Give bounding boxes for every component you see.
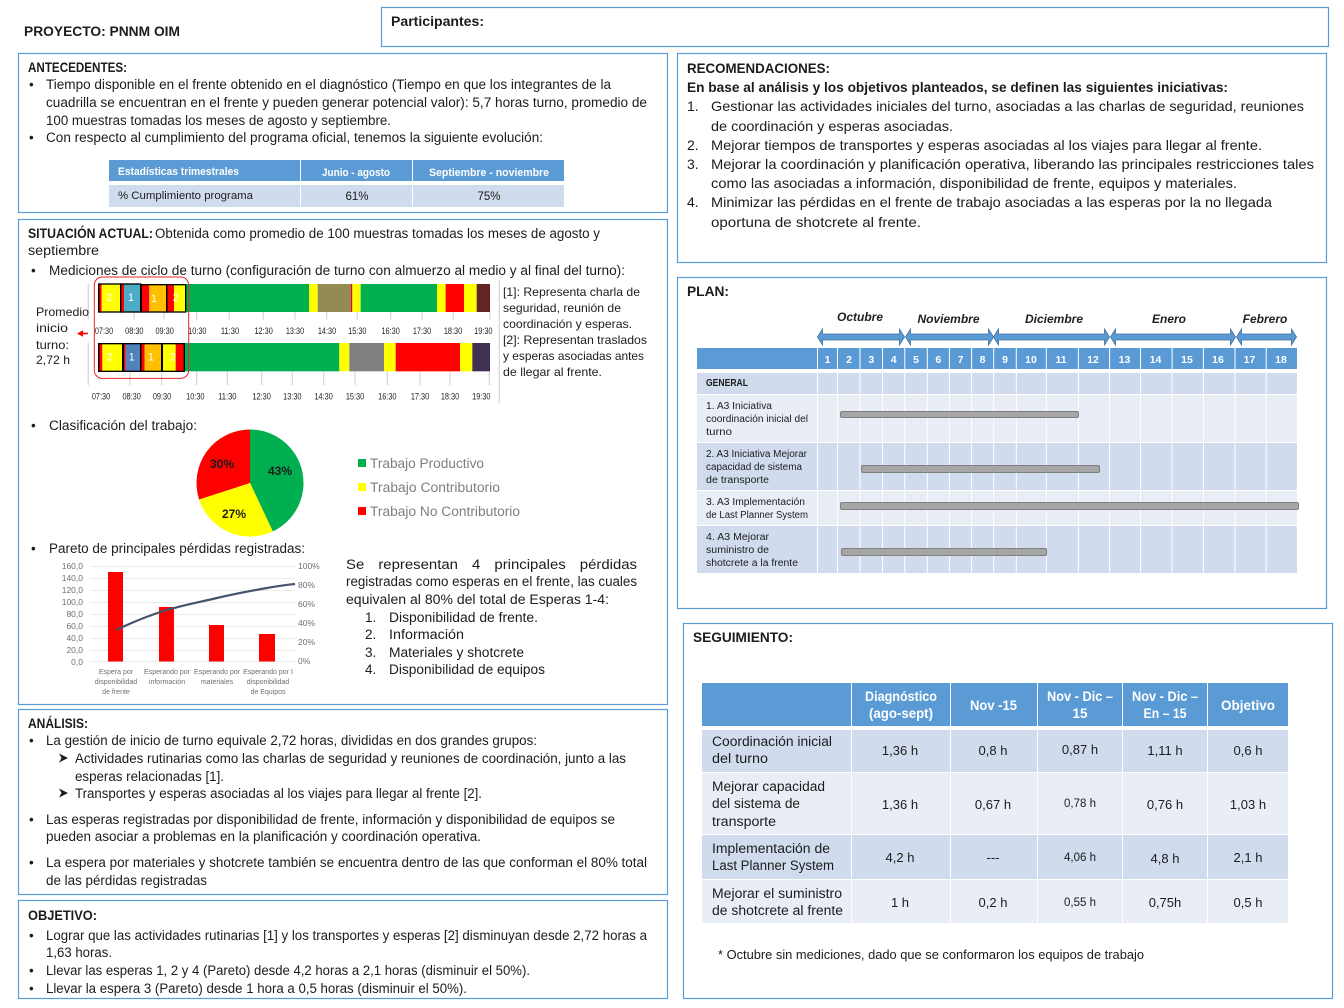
table: seguimiento: 1,36 h <box>882 743 918 758</box>
table: seguimiento: del sistema de <box>712 796 800 811</box>
table: seguimiento: Mejorar capacidad <box>712 779 825 794</box>
list: iniciativas: oportuna de shotcrete al frente. <box>711 214 921 230</box>
panel: participantes <box>382 8 1328 46</box>
list: iniciativas: de coordinación y esperas asociadas. <box>711 118 953 134</box>
text block: análisis: La espera por materiales y shotcrete también se encuentra dentro de las que conforman el 80% total <box>46 855 647 870</box>
bar: turno 1: 2 <box>107 292 113 304</box>
axis labels: turno 1: 09:30 <box>155 326 174 336</box>
table: seguimiento: Mejorar el suministro <box>712 886 842 901</box>
chart: pareto: 100,0 <box>62 597 83 607</box>
text block: análisis: • <box>29 855 34 870</box>
axis labels: turno 2: 09:30 <box>153 392 171 402</box>
text: notas [1] y [2]: coordinación y esperas. <box>503 317 632 331</box>
list: iniciativas: Gestionar las actividades iniciales del turno, asociadas a las charlas de seguridad, reuniones <box>711 98 1304 114</box>
table: seguimiento: 0,5 h <box>1234 895 1262 910</box>
gantt: months: Octubre <box>837 310 883 324</box>
chart: pareto: de frente <box>102 689 130 696</box>
text block: explicación pareto: 1. <box>365 610 376 625</box>
heading: situación actual: septiembre <box>28 243 99 258</box>
axis labels: turno 1: 17:30 <box>413 326 431 336</box>
gantt: row labels <box>706 378 808 569</box>
list: iniciativas: como las asociadas a información, disponibilidad de frente, equipos y materiales. <box>711 175 1237 191</box>
heading: recomendaciones: RECOMENDACIONES: <box>687 60 830 76</box>
table: seguimiento: 2,1 h <box>1234 850 1262 865</box>
callout: inicio de turno outline <box>94 277 189 378</box>
gantt: grid: 17 <box>1244 354 1255 366</box>
table: estadísticas trimestrales: Septiembre - noviembre <box>429 167 549 179</box>
gantt: row labels: 1. A3 Iniciativa <box>706 401 772 412</box>
list: iniciativas: Mejorar la coordinación y planificación operativa, liberando las principales restricciones tales <box>711 156 1314 172</box>
text block: objetivo: • <box>29 963 34 978</box>
axis labels: turno 1: 11:30 <box>221 326 239 336</box>
text block: análisis: Actividades rutinarias como las charlas de seguridad y reuniones de coordinación, junto a las <box>75 751 626 766</box>
chart: pareto: Esperando por I <box>243 669 293 676</box>
heading: antecedentes: ANTECEDENTES: <box>28 59 127 75</box>
chart: pareto: 20% <box>298 637 315 647</box>
text block: explicación pareto: Información <box>389 627 464 642</box>
chart: pareto: disponibilidad <box>247 679 289 686</box>
gantt: row labels: 2. A3 Iniciativa Mejorar <box>706 449 808 460</box>
heading: situación actual: SITUACIÓN ACTUAL: <box>28 224 153 241</box>
chart: pareto: 80,0 <box>66 609 83 619</box>
gantt: grid: 12 <box>1087 354 1099 366</box>
heading: análisis: ANÁLISIS: <box>28 715 88 731</box>
text block: explicación pareto: 4. <box>365 662 376 677</box>
gantt: row labels: 3. A3 Implementación <box>706 497 805 508</box>
text: clasificación del trabajo: Clasificación del trabajo: <box>49 418 197 433</box>
chart: pareto: de Equipos <box>250 689 286 696</box>
gantt: row labels: shotcrete a la frente <box>706 558 798 569</box>
table: seguimiento: de shotcrete al frente <box>712 903 843 918</box>
axis labels: turno 2: 10:30 <box>186 392 204 402</box>
list: iniciativas: 2. <box>687 137 699 153</box>
pie chart: clasificación del trabajo: 43% <box>268 464 292 478</box>
pie chart: clasificación del trabajo <box>196 430 304 537</box>
table: seguimiento: Last Planner System <box>712 858 834 873</box>
table: seguimiento: Diagnóstico <box>865 689 937 704</box>
text block: antecedentes: Tiempo disponible en el frente obtenido en el diagnóstico (Tiempo en que los integrantes de la <box>46 77 611 92</box>
arrow: promedio inicio turno <box>77 330 88 337</box>
axis labels: turno 2: 13:30 <box>283 392 301 402</box>
legend: clasificación <box>358 456 520 519</box>
table: seguimiento: 4,06 h <box>1064 852 1096 864</box>
axis labels: turno 2: 16:30 <box>378 392 396 402</box>
text block: explicación pareto: 3. <box>365 645 376 660</box>
gantt: row labels: suministro de <box>706 545 769 556</box>
panel: recomendaciones <box>678 54 1326 262</box>
pie chart: clasificación del trabajo: 27% <box>222 507 246 521</box>
gantt: row labels: 4. A3 Mejorar <box>706 532 770 543</box>
panel: plan <box>678 278 1326 608</box>
table: seguimiento: 0,75h <box>1149 895 1181 910</box>
table: seguimiento: 15 <box>1072 706 1088 721</box>
panel: seguimiento <box>684 624 1332 998</box>
text block: explicación pareto <box>346 557 637 677</box>
text: promedio inicio turno <box>36 305 89 367</box>
gantt: row labels: GENERAL <box>706 378 748 389</box>
gantt: grid: 7 <box>958 354 964 366</box>
gantt: grid: 11 <box>1055 354 1067 366</box>
axis labels: turno 1: 13:30 <box>286 326 304 336</box>
table: estadísticas trimestrales: 61% <box>345 191 369 203</box>
text: promedio inicio turno: inicio <box>36 321 68 335</box>
table: seguimiento: 0,8 h <box>979 743 1007 758</box>
pie chart: clasificación del trabajo: 30% <box>210 457 234 471</box>
list: iniciativas: Mejorar tiempos de transportes y esperas asociadas al los viajes para llegar al frente. <box>711 137 1262 153</box>
table: seguimiento: del turno <box>712 751 768 766</box>
gantt: grid: 5 <box>913 354 919 366</box>
gantt: grid: 9 <box>1002 354 1008 366</box>
text block: objetivo: • <box>29 981 34 996</box>
list: iniciativas: 3. <box>687 156 699 172</box>
axis labels: turno 1: 12:30 <box>254 326 273 336</box>
subheading: iniciativas: En base al análisis y los objetivos planteados, se definen las siguientes iniciativas: <box>687 79 1228 95</box>
list: iniciativas: Minimizar las pérdidas en el frente de trabajo asociadas a las esperas por la no llegada <box>711 194 1272 210</box>
table: seguimiento: 4,8 h <box>1151 851 1179 866</box>
gantt: row labels: coordinación inicial del <box>706 414 808 425</box>
chart: pareto: 40% <box>298 618 315 628</box>
text block: explicación pareto: 2. <box>365 627 376 642</box>
list: iniciativas: 4. <box>687 194 699 210</box>
text block: explicación pareto: Disponibilidad de frente. <box>389 610 538 625</box>
gantt: grid: 13 <box>1119 354 1130 366</box>
heading: situación actual <box>28 224 600 258</box>
text: promedio inicio turno: Promedio <box>36 305 89 319</box>
text: mediciones de ciclo: • <box>31 263 36 278</box>
gantt: row labels: turno <box>706 427 732 438</box>
table: seguimiento: 0,87 h <box>1062 742 1098 757</box>
heading: plan: PLAN: <box>687 283 729 299</box>
chart: pareto: materiales <box>201 679 234 686</box>
gantt: grid <box>697 348 1297 573</box>
gantt: grid: 18 <box>1275 354 1287 366</box>
axis labels: turno 1: 15:30 <box>348 326 366 336</box>
chart: pareto: información <box>149 679 185 686</box>
axis labels: turno 1 <box>95 326 492 336</box>
text: notas [1] y [2]: de llegar al frente. <box>503 365 602 379</box>
gantt: row labels: de transporte <box>706 475 769 486</box>
table: seguimiento: --- <box>986 850 1000 865</box>
axis labels: turno 2: 18:30 <box>441 392 459 402</box>
table: seguimiento: Implementación de <box>712 841 830 856</box>
text block: análisis: de las pérdidas registradas <box>46 873 207 888</box>
table: estadísticas trimestrales: % Cumplimiento programa <box>118 190 254 202</box>
text: clasificación del trabajo: • <box>31 418 36 433</box>
axis labels: turno 2: 14:30 <box>314 392 333 402</box>
axis labels: turno 2: 12:30 <box>252 392 271 402</box>
table: seguimiento: Nov -15 <box>970 698 1017 713</box>
table: seguimiento: Coordinación inicial <box>712 734 832 749</box>
text block: análisis: esperas relacionadas [1]. <box>75 769 224 784</box>
table: estadísticas trimestrales: Junio - agosto <box>322 167 390 179</box>
chart: pareto: 20,0 <box>66 645 83 655</box>
text block: análisis: • <box>29 812 34 827</box>
text: promedio inicio turno: 2,72 h <box>36 353 70 367</box>
table: seguimiento: 0,55 h <box>1064 897 1096 909</box>
table: seguimiento: transporte <box>712 814 776 829</box>
text block: análisis: Transportes y esperas asociadas al los viajes para llegar al frente [2]. <box>75 786 482 801</box>
legend: clasificación: Trabajo Productivo <box>370 456 484 471</box>
chart: pareto: disponibilidad <box>95 679 137 686</box>
text block: análisis: • <box>29 733 34 748</box>
panel: análisis <box>18 710 668 894</box>
axis labels: turno 1: 14:30 <box>318 326 336 336</box>
text: notas [1] y [2]: y esperas asociadas antes <box>503 349 644 363</box>
panel: antecedentes <box>18 54 668 212</box>
table: estadísticas trimestrales: Estadísticas trimestrales <box>118 166 239 178</box>
gantt: grid: 15 <box>1181 354 1193 366</box>
table: estadísticas trimestrales: 75% <box>477 191 501 203</box>
table: seguimiento: 0,78 h <box>1064 798 1096 810</box>
text block: objetivo: Lograr que las actividades rutinarias [1] y los transportes y esperas [2] disminuyan desde 2,72 horas a <box>46 928 647 943</box>
chart: pareto: 160,0 <box>62 561 83 571</box>
gantt: months <box>818 310 1296 345</box>
gantt: bar iniciativa 3 <box>840 502 1298 510</box>
axis labels: turno 1: 18:30 <box>444 326 462 336</box>
text block: objetivo: • <box>29 928 34 943</box>
table: seguimiento: Objetivo <box>1221 698 1275 713</box>
gantt: months: Noviembre <box>917 312 980 326</box>
chart: pareto: 0,0 <box>71 657 83 667</box>
chart: ciclos de turno <box>88 277 499 403</box>
gantt: grid: 16 <box>1212 354 1224 366</box>
axis labels: turno 2: 17:30 <box>411 392 429 402</box>
axis labels: turno 1: 16:30 <box>381 326 400 336</box>
bar: turno 1: 1 <box>128 292 134 304</box>
chart: pareto: Espera por <box>99 669 134 676</box>
gantt: bar iniciativa 1 <box>840 412 1078 418</box>
table: estadísticas trimestrales <box>109 160 564 207</box>
footnote: * Octubre sin mediciones, dado que se conformaron los equipos de trabajo <box>718 947 1144 962</box>
gantt: grid: 4 <box>891 354 897 366</box>
legend: clasificación: Trabajo No Contributorio <box>370 504 520 519</box>
gantt: months: Febrero <box>1243 312 1287 326</box>
panel: participantes: Participantes: <box>391 14 484 29</box>
axis labels: turno 1: 19:30 <box>474 326 492 336</box>
gantt: grid: 10 <box>1025 354 1037 366</box>
text block: análisis <box>29 733 647 888</box>
bar: turno 1: 2 <box>173 292 179 304</box>
axis labels: turno 1: 08:30 <box>125 326 143 336</box>
text block: explicación pareto: Disponibilidad de equipos <box>389 662 545 677</box>
axis labels: turno 2 <box>92 392 490 402</box>
title: PROYECTO: PNNM OIM <box>24 24 180 39</box>
table: seguimiento: (ago-sept) <box>869 706 933 721</box>
bar: turno 2: 2 <box>170 352 176 364</box>
axis labels: turno 2: 15:30 <box>346 392 364 402</box>
bar: turno 2 <box>98 343 490 371</box>
text block: antecedentes <box>29 77 647 145</box>
table: seguimiento: 0,67 h <box>975 797 1011 812</box>
chart: pareto <box>62 561 320 696</box>
axis labels: turno 1: 10:30 <box>188 326 206 336</box>
bar: turno 2: 1 <box>148 352 154 364</box>
list: iniciativas: 1. <box>687 98 699 114</box>
text block: explicación pareto: registradas como esperas en el frente, las cuales <box>346 574 637 589</box>
bar: turno 2: 2 <box>107 352 113 364</box>
table: seguimiento: 1 h <box>891 895 909 910</box>
text block: explicación pareto: equivalen al 80% del total de Esperas 1-4: <box>346 592 609 607</box>
bar: turno 1: 1 <box>151 293 157 305</box>
text block: antecedentes: 100 muestras tomadas los meses de agosto y septiembre. <box>46 113 391 128</box>
table: seguimiento: 1,03 h <box>1230 797 1266 812</box>
chart: pareto: 60% <box>298 599 315 609</box>
gantt: grid: 6 <box>935 354 941 366</box>
text: notas [1] y [2]: [2]: Representan traslados <box>503 333 647 347</box>
text block: antecedentes: Con respecto al cumplimiento del programa oficial, tenemos la siguiente evolución: <box>46 130 543 145</box>
text block: antecedentes: cuadrilla se encuentran en el frente y pueden generar potencial valor): 5,7 horas turno, promedio de <box>46 95 647 110</box>
text block: objetivo: 1,63 horas. <box>46 945 112 960</box>
text block: objetivo: Llevar las esperas 1, 2 y 4 (Pareto) desde 4,2 horas a 2,1 horas (disminuir el 50%). <box>46 963 530 978</box>
table: seguimiento: 0,76 h <box>1147 797 1183 812</box>
table: seguimiento: Nov - Dic – <box>1132 689 1198 704</box>
chart: pareto: Esperando por <box>194 669 241 676</box>
axis labels: turno 2: 11:30 <box>218 392 236 402</box>
panel: situación actual <box>18 220 668 704</box>
chart: pareto: 120,0 <box>62 585 83 595</box>
axis labels: turno 2: 07:30 <box>92 392 110 402</box>
text block: explicación pareto: Se representan 4 principales pérdidas <box>346 557 637 572</box>
panel: objetivo <box>18 900 668 998</box>
gantt: grid: 3 <box>868 354 874 366</box>
text: pareto heading: Pareto de principales pérdidas registradas: <box>49 541 305 556</box>
gantt: grid: 8 <box>980 354 986 366</box>
table: seguimiento: 4,2 h <box>886 850 914 865</box>
chart: pareto: 80% <box>298 580 315 590</box>
gantt: row labels: capacidad de sistema <box>706 462 802 473</box>
text: mediciones de ciclo: Mediciones de ciclo de turno (configuración de turno con almuerzo al medio y al final del turno): <box>49 263 625 278</box>
heading: seguimiento: SEGUIMIENTO: <box>693 629 793 645</box>
gantt: months: Enero <box>1152 312 1186 326</box>
bar: turno 2: 1 <box>129 352 135 364</box>
list: iniciativas <box>687 98 1314 230</box>
heading: situación actual: Obtenida como promedio de 100 muestras tomadas los meses de agosto y <box>155 226 600 241</box>
text block: análisis: Las esperas registradas por disponibilidad de frente, información y disponibilidad de equipos se <box>46 812 615 827</box>
text: promedio inicio turno: turno: <box>36 338 69 352</box>
text block: objetivo <box>29 928 647 996</box>
chart: pareto: Esperando por <box>144 669 191 676</box>
gantt: grid: 1 <box>825 354 831 366</box>
text block: análisis: La gestión de inicio de turno equivale 2,72 horas, divididas en dos grandes grupos: <box>46 733 537 748</box>
table: seguimiento: 1,36 h <box>882 797 918 812</box>
text: notas [1] y [2]: seguridad, reunión de <box>503 301 621 315</box>
text: notas [1] y [2] <box>503 285 647 379</box>
gantt: bar iniciativa 2 <box>862 466 1100 472</box>
table: seguimiento: Nov - Dic – <box>1047 689 1113 704</box>
axis labels: turno 2: 08:30 <box>122 392 141 402</box>
gantt: grid: 14 <box>1150 354 1161 366</box>
legend: clasificación: Trabajo Contributorio <box>370 480 500 495</box>
chart: pareto: 100% <box>298 561 320 571</box>
table: seguimiento: 0,2 h <box>979 895 1007 910</box>
chart: pareto: 60,0 <box>66 621 83 631</box>
table: seguimiento: 1,11 h <box>1147 743 1183 758</box>
text: notas [1] y [2]: [1]: Representa charla de <box>503 285 640 299</box>
bar: turno 1 <box>98 284 490 312</box>
gantt: grid: 2 <box>846 354 852 366</box>
text: pareto heading: • <box>31 541 36 556</box>
gantt: bar iniciativa 4 <box>842 548 1046 556</box>
axis labels: turno 2: 19:30 <box>472 392 490 402</box>
table: seguimiento: En – 15 <box>1144 706 1187 721</box>
text block: objetivo: Llevar la espera 3 (Pareto) desde 1 hora a 0,5 horas (disminuir el 50%). <box>46 981 467 996</box>
gantt: months: Diciembre <box>1025 312 1083 326</box>
text block: antecedentes: • <box>29 130 34 145</box>
text block: explicación pareto: Materiales y shotcrete <box>389 645 524 660</box>
table: seguimiento: 0,6 h <box>1234 743 1262 758</box>
heading: objetivo: OBJETIVO: <box>28 907 97 923</box>
text block: análisis: pueden asociar a problemas en la planificación y coordinación operativa. <box>46 829 481 844</box>
table: seguimiento <box>702 683 1288 923</box>
chart: pareto: 40,0 <box>66 633 83 643</box>
text block: antecedentes: • <box>29 77 34 92</box>
gantt: row labels: de Last Planner System <box>706 510 808 521</box>
chart: pareto: 0% <box>298 656 311 666</box>
axis labels: turno 1: 07:30 <box>95 326 113 336</box>
chart: pareto: 140,0 <box>62 573 83 583</box>
